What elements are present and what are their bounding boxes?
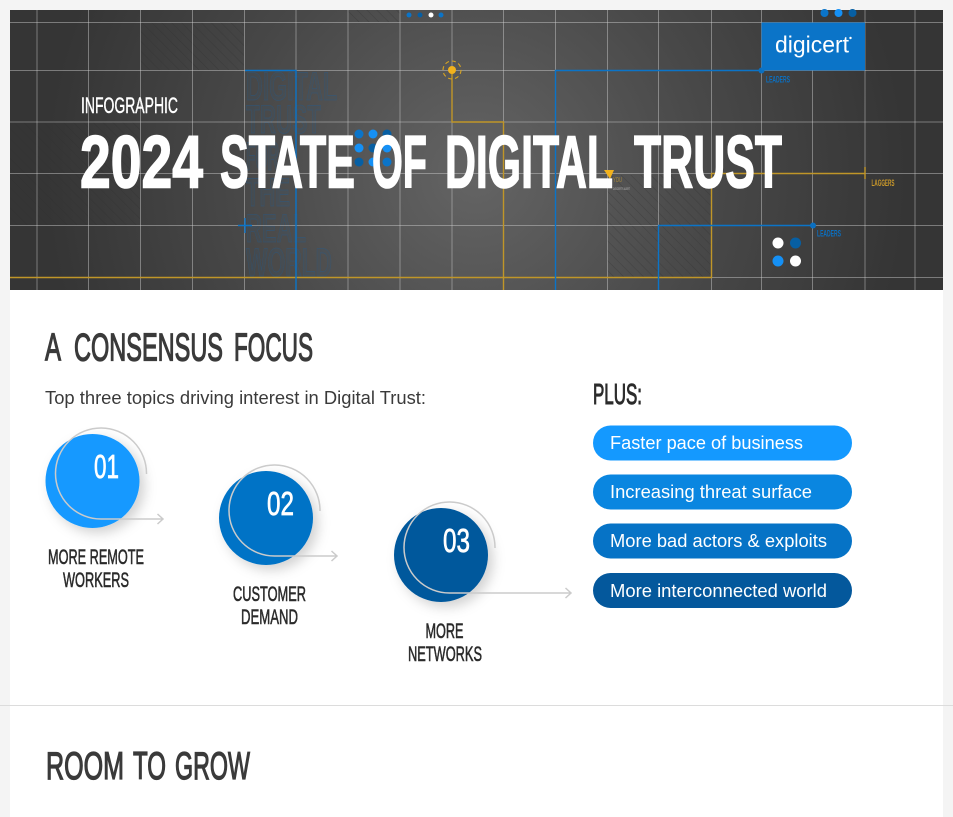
step 2: CUSTOMER <box>233 582 306 606</box>
pill 4: More interconnected world <box>610 581 827 601</box>
banner kicker: INFOGRAPHIC <box>81 93 178 118</box>
plus heading: PLUS: <box>593 379 642 411</box>
banner title: DIGITAL <box>445 120 613 204</box>
step 3: MORE <box>426 619 464 643</box>
step 1: MORE REMOTE <box>48 545 144 569</box>
icon: gold target <box>448 66 456 74</box>
ghost text: digital trust for the real world: FOR <box>246 135 279 179</box>
step 1: WORKERS <box>63 568 129 592</box>
banner <box>10 9 943 290</box>
pill 1: Faster pace of business <box>610 433 803 453</box>
step 2: DEMAND <box>241 605 298 629</box>
marker caption <box>613 177 630 191</box>
ghost text: digital trust for the real world: WORLD <box>246 241 332 285</box>
banner title: STATE <box>220 120 355 204</box>
step 1: 01 <box>94 448 119 485</box>
marker caption: YOU <box>613 177 622 184</box>
labels: leaders and laggers: LEADERS <box>817 228 841 238</box>
heading: room to grow: ROOM <box>46 745 124 788</box>
pill 1 <box>593 426 852 460</box>
ghost text: digital trust for the real world: THE <box>246 171 290 215</box>
step 2: 02 <box>267 485 294 522</box>
top dots left <box>406 12 444 18</box>
step 3 <box>394 502 571 666</box>
ghost text: digital trust for the real world: TRUST <box>246 98 321 142</box>
banner title: OF <box>372 120 427 204</box>
pill 3: More bad actors & exploits <box>610 531 827 551</box>
step 3: NETWORKS <box>408 642 482 666</box>
pill 4 <box>593 573 852 608</box>
logo: digicert: digicert <box>775 32 850 58</box>
heading: room to grow: GROW <box>175 745 250 788</box>
blue chart lines <box>238 70 812 290</box>
labels: leaders and laggers <box>766 74 894 238</box>
page panel <box>10 290 943 817</box>
heading: a consensus focus: FOCUS <box>234 326 313 370</box>
intro text: Top three topics driving interest in Digital Trust: <box>45 388 426 408</box>
heading: room to grow <box>46 745 250 788</box>
top dots right <box>820 9 856 17</box>
icon: gold marker <box>604 170 614 179</box>
heading: room to grow: TO <box>133 745 166 788</box>
gold chart lines <box>10 61 865 290</box>
divider <box>0 705 953 706</box>
ghost text: digital trust for the real world <box>246 65 337 285</box>
labels: leaders and laggers: LAGGERS <box>872 178 894 188</box>
dot cluster <box>354 130 392 166</box>
chart nodes <box>758 68 816 228</box>
heading: a consensus focus: CONSENSUS <box>74 326 223 370</box>
pill 2 <box>593 474 852 510</box>
step 3: 03 <box>443 522 470 559</box>
banner title: TRUST <box>634 120 782 204</box>
step 2 <box>219 465 337 629</box>
banner title <box>80 120 782 204</box>
logo: digicert <box>762 22 865 70</box>
pill 3 <box>593 524 852 558</box>
heading: a consensus focus: A <box>45 326 61 370</box>
labels: leaders and laggers: LEADERS <box>766 74 790 84</box>
step 1 <box>46 428 163 592</box>
banner title: 2024 <box>80 120 203 204</box>
ghost text: digital trust for the real world: REAL <box>246 207 306 251</box>
dots bottom right <box>772 238 801 266</box>
ghost text: digital trust for the real world: DIGITAL <box>246 65 337 109</box>
pill 2: Increasing threat surface <box>610 482 812 502</box>
banner: DIGICERT'S ALERT <box>613 186 630 191</box>
